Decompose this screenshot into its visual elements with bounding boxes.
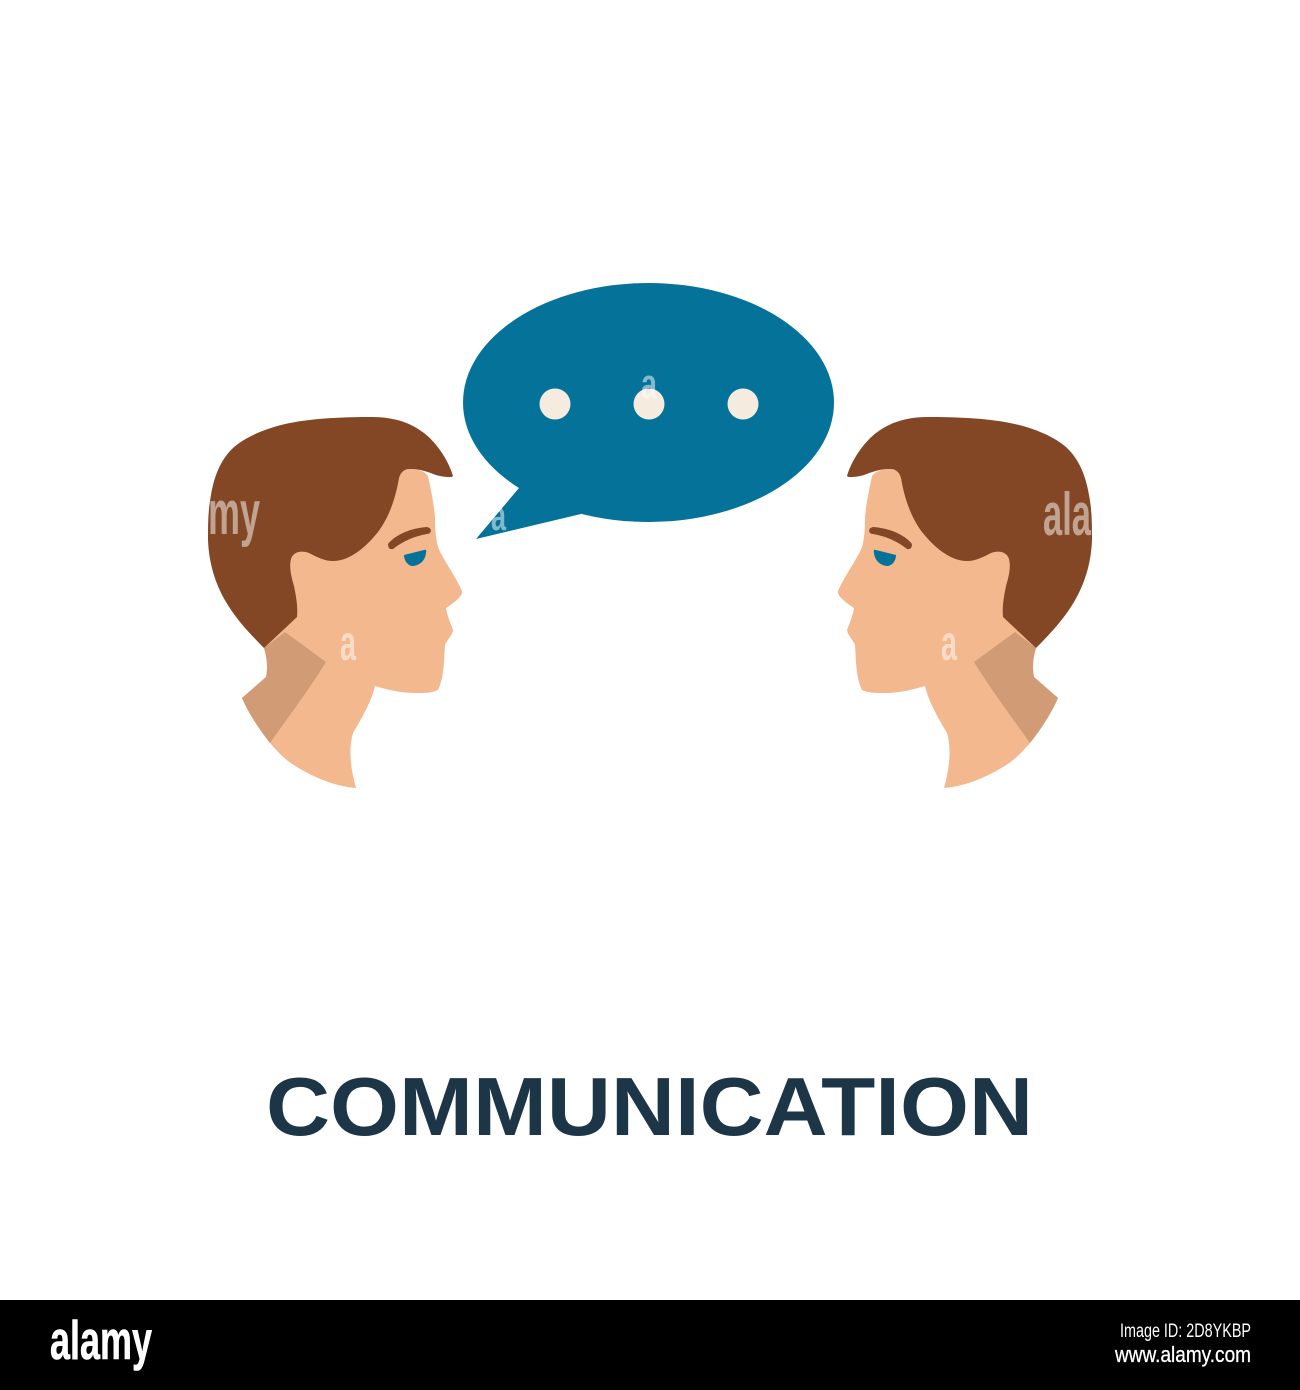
watermark on right head: ala [1043, 481, 1091, 548]
footer logo: alamy [50, 1309, 152, 1371]
watermark above dot: a [641, 360, 657, 407]
icon: left head profile [208, 417, 462, 788]
ellipsis dots [540, 388, 758, 420]
watermark on right head: a [941, 615, 958, 671]
website: www.alamy.com [1114, 1342, 1251, 1367]
watermark on left head [208, 479, 357, 671]
watermark on left head: a [340, 615, 357, 671]
image id: Image ID: 2D8YKBP [1120, 1321, 1251, 1342]
footer bar [0, 1300, 1300, 1390]
watermark on left head: my [208, 479, 260, 548]
icon: right head profile [838, 417, 1092, 788]
icon: speech bubble [463, 283, 834, 539]
watermark in bubble tail: a [491, 492, 506, 539]
title: COMMUNICATION [266, 1060, 1033, 1153]
watermark on right head [941, 481, 1091, 671]
